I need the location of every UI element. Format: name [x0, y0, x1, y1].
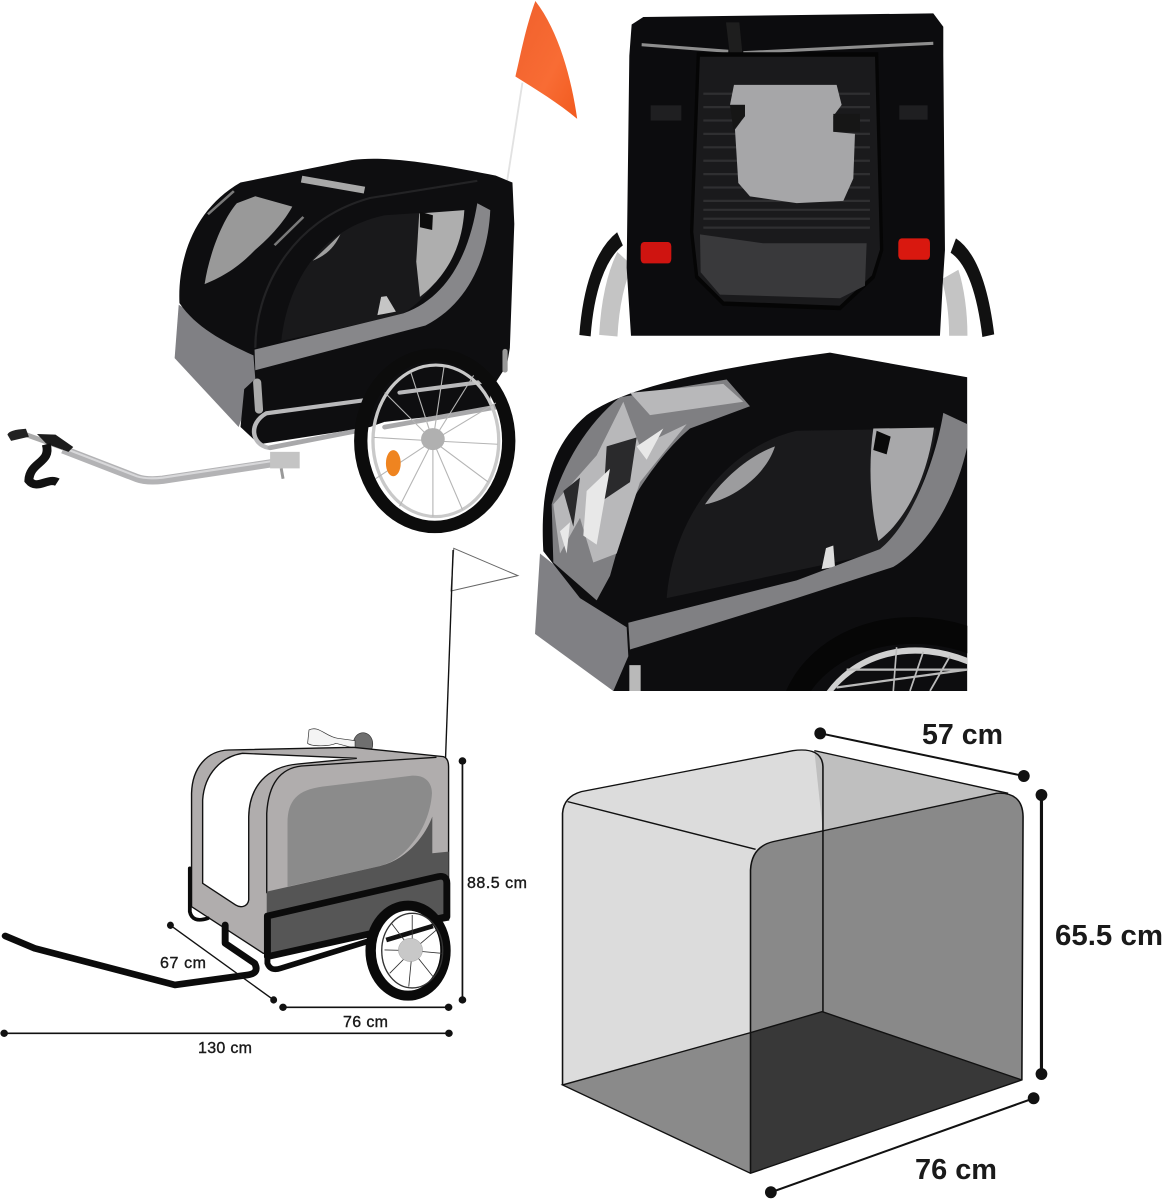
flag outline: [445, 548, 518, 760]
front mesh window: [205, 196, 292, 284]
side window: [288, 776, 432, 887]
reflective line: [642, 43, 933, 53]
mesh sliver right: [870, 428, 934, 541]
box outlines: [563, 750, 1023, 1173]
wheel: [371, 906, 445, 996]
right wall: [750, 793, 1023, 1173]
label 76 cm: 76 cm: [343, 1014, 388, 1031]
gray end panel: [535, 554, 630, 691]
dark band: [267, 817, 449, 917]
dimension 76 line: [279, 1004, 452, 1011]
big wheel: [361, 355, 509, 527]
line drawing: trailer with outer dimensions: [0, 548, 518, 1037]
dimension 67 line: [167, 922, 277, 1004]
black body: [543, 353, 967, 691]
photo: trailer three-quarter view: [7, 1, 577, 527]
white front opening: [203, 753, 357, 907]
left patch: [651, 105, 681, 121]
light mesh window: [730, 85, 855, 203]
frame and tow bar: [5, 868, 372, 985]
top strap: [726, 22, 743, 56]
black canopy: [179, 159, 514, 444]
dimension 76 line: [765, 1092, 1040, 1198]
dimension 130 line: [0, 1030, 453, 1037]
top right back panel: [814, 751, 1008, 832]
side mesh panel: [667, 429, 937, 598]
side panel line: [267, 757, 436, 893]
roof bone handle: [308, 729, 373, 755]
small mesh sliver: [313, 234, 340, 261]
mesh horizontal weave: [703, 94, 870, 228]
reflective glare shards: [553, 384, 743, 562]
label 130 cm: 130 cm: [198, 1040, 252, 1057]
label 57 cm: 57 cm: [922, 719, 1003, 751]
wheel segment: [793, 630, 977, 701]
left light wall: [563, 750, 823, 1085]
gray reflective stripe: [255, 203, 490, 370]
left wheel: [585, 239, 625, 336]
hitch strap: [7, 429, 73, 484]
rear black body: [627, 13, 945, 336]
axle and frame: [254, 351, 505, 448]
gray bottom panel: [175, 305, 256, 427]
small white glint: [822, 546, 835, 569]
lower door panel: [700, 234, 867, 298]
lower panel: [267, 876, 447, 957]
dimension 57 line: [814, 727, 1030, 782]
top handle bar: [302, 179, 364, 190]
inner straps: [730, 105, 860, 132]
interior box diagram: [563, 727, 1047, 1198]
photo: closeup of canopy and rain cover: [535, 353, 977, 701]
side mesh window: [416, 210, 464, 297]
front zipper detail: [208, 191, 303, 245]
dimension 88.5 line: [459, 757, 466, 1004]
label 67 cm: 67 cm: [160, 955, 206, 972]
left red reflector: [641, 242, 671, 263]
dark floor: [750, 1012, 1022, 1173]
dimension 65.5 line: [1036, 789, 1047, 1080]
mesh door: [692, 54, 882, 308]
gray stripe: [628, 413, 967, 650]
tow bar: [63, 448, 300, 480]
clear rain window: [552, 379, 750, 600]
right wheel: [950, 246, 988, 336]
mesh sliver left: [705, 446, 775, 504]
trailer silhouette: [192, 747, 449, 953]
right red reflector: [898, 238, 930, 260]
label 88.5 cm: 88.5 cm: [467, 875, 527, 892]
side mesh panel: [281, 210, 462, 341]
photo: rear view of trailer: [585, 13, 988, 336]
canopy seam: [255, 181, 477, 348]
orange safety flag: [507, 1, 577, 183]
frame tube: [629, 665, 641, 691]
label 65.5 cm: 65.5 cm: [1055, 920, 1163, 952]
left floor: [563, 1033, 750, 1173]
right patch: [899, 105, 928, 120]
label 76 cm box: 76 cm: [915, 1154, 997, 1186]
